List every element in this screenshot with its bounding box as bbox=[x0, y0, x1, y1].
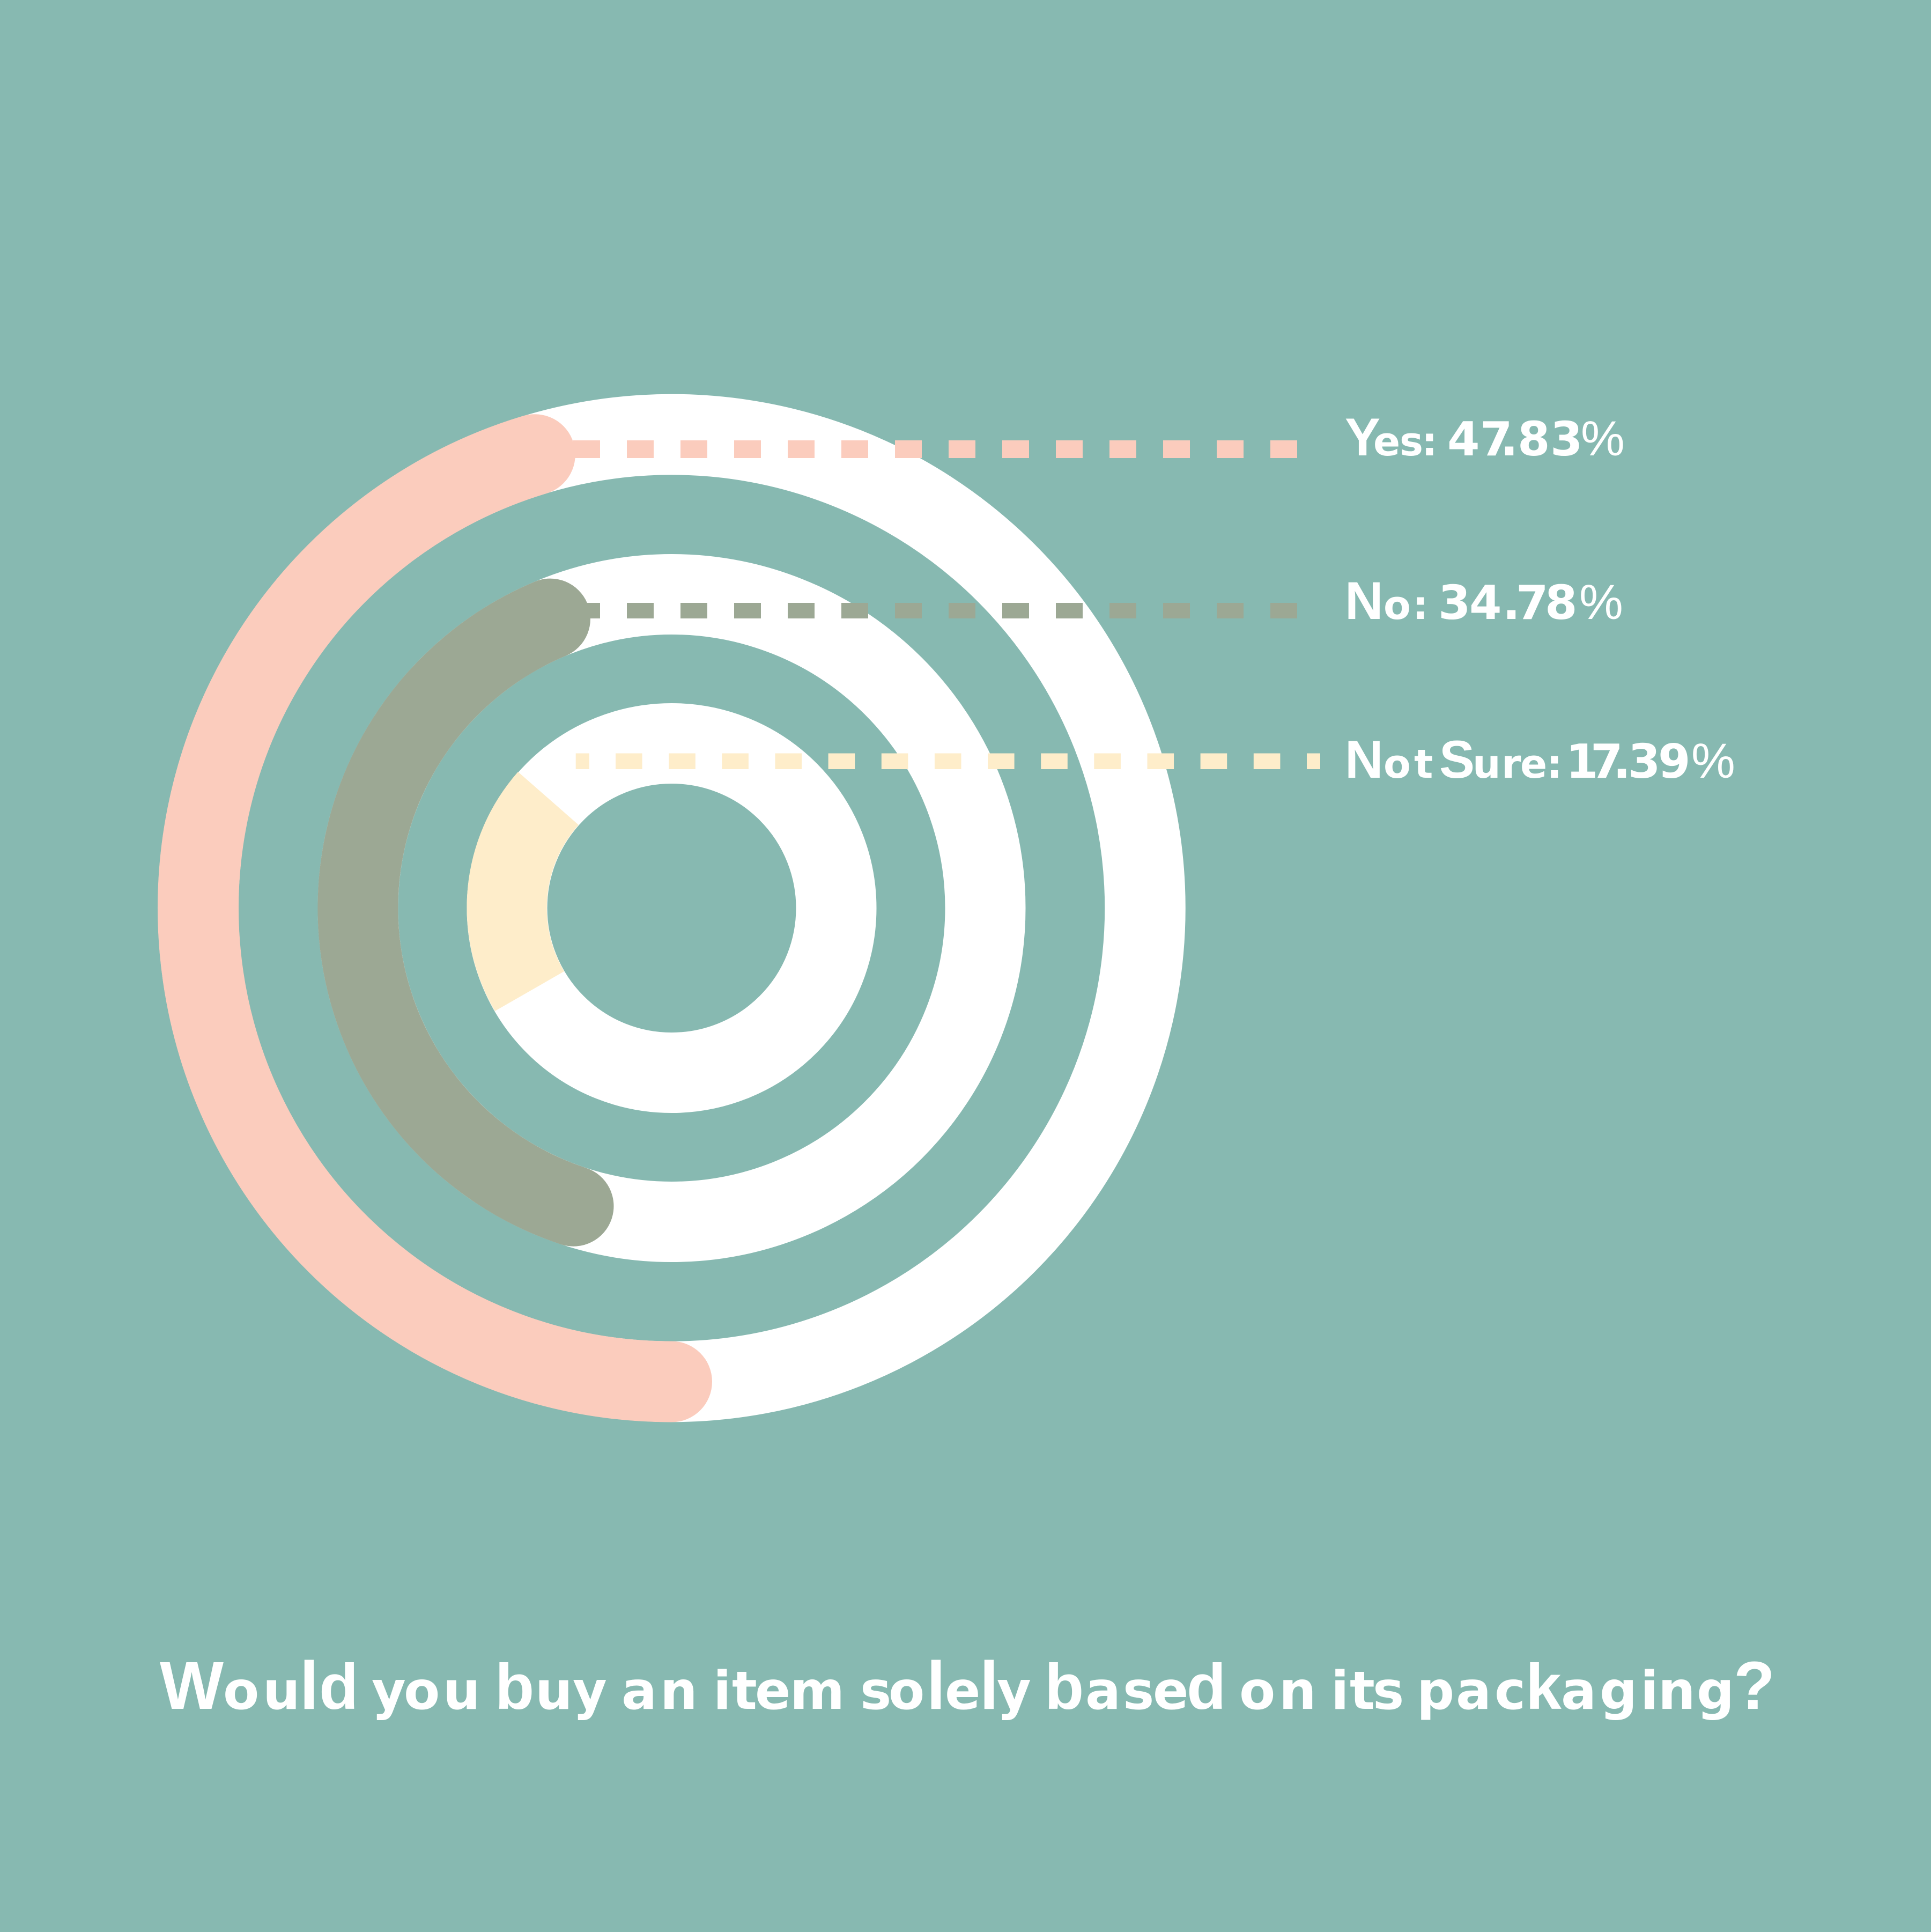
title: uy bbox=[535, 1661, 607, 1722]
label: Not Sure: 17.39 bbox=[1566, 734, 1691, 789]
dashed leader: Yes bbox=[573, 440, 1297, 458]
arc: Not Sure 17.39% bbox=[467, 772, 579, 1011]
label: Yes: % bbox=[1581, 411, 1625, 466]
label: Yes: es: bbox=[1373, 419, 1438, 465]
title: item bbox=[713, 1661, 845, 1722]
label: Not Sure: ure: bbox=[1473, 741, 1563, 787]
title: ? bbox=[1734, 1648, 1775, 1723]
track: outer ring bbox=[198, 434, 1145, 1382]
label: Not Sure: N bbox=[1345, 729, 1383, 789]
title: y bbox=[997, 1661, 1031, 1722]
track: inner ring bbox=[507, 743, 837, 1073]
label: Not Sure: ot bbox=[1383, 741, 1433, 787]
title: W bbox=[160, 1648, 224, 1723]
dashed leader: Not Sure bbox=[576, 753, 1320, 769]
title: an bbox=[622, 1661, 698, 1722]
title: b bbox=[1045, 1651, 1084, 1723]
title: l bbox=[300, 1648, 319, 1723]
title: pac bbox=[1417, 1661, 1526, 1722]
label: No: N bbox=[1345, 571, 1383, 630]
label: Not Sure: % bbox=[1691, 734, 1735, 788]
title: ou bbox=[223, 1661, 300, 1722]
title: on bbox=[1239, 1661, 1316, 1722]
title: d bbox=[1187, 1651, 1226, 1723]
label: No: % bbox=[1579, 575, 1623, 630]
dashed leader: No bbox=[573, 603, 1297, 618]
title: b bbox=[495, 1651, 534, 1723]
title: e bbox=[945, 1661, 980, 1722]
radial chart bbox=[198, 434, 1145, 1382]
title: so bbox=[860, 1661, 924, 1722]
label: Not Sure: S bbox=[1439, 729, 1475, 789]
label: Yes: 47.83 bbox=[1447, 412, 1583, 467]
arc: Yes 47.83% bbox=[198, 455, 672, 1382]
title: l bbox=[927, 1648, 945, 1723]
title: k bbox=[1526, 1651, 1562, 1723]
arc: No 34.78% bbox=[358, 619, 574, 1206]
title: you bbox=[372, 1661, 480, 1722]
track: middle ring bbox=[358, 594, 986, 1222]
label: Yes: Y bbox=[1345, 407, 1380, 467]
label: No: 34.78 bbox=[1438, 576, 1578, 630]
title: ase bbox=[1085, 1661, 1188, 1722]
title: l bbox=[980, 1648, 998, 1723]
title: its bbox=[1331, 1661, 1404, 1722]
label: No: o: bbox=[1383, 582, 1429, 629]
title: d bbox=[319, 1651, 358, 1723]
title: aging bbox=[1561, 1661, 1734, 1722]
